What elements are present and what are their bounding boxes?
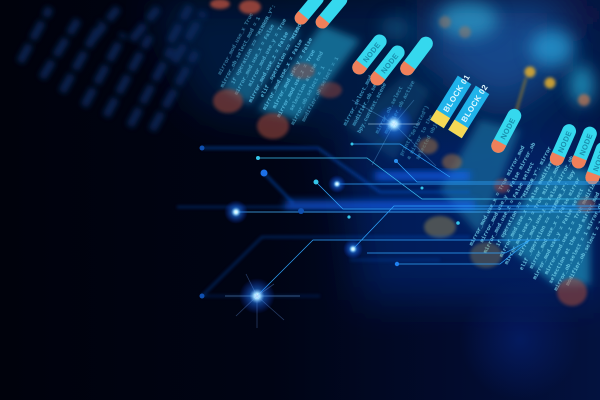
- panel: code text left block: mirror_mod.use_x True: [216, 11, 255, 76]
- node pill 6: [491, 108, 522, 153]
- node pill 7: [550, 124, 576, 166]
- node pill 8: [572, 126, 597, 168]
- node pill 9: [585, 142, 600, 184]
- blurred orange and yellow tips: [439, 16, 590, 112]
- panel: code text middle block: selected object: [414, 114, 444, 161]
- node pill 3: [352, 34, 387, 74]
- panel: code text right block: mirror_mod.use_z = False select: [482, 161, 536, 254]
- node pill 1: [294, 0, 324, 24]
- blurred red node tips: [210, 0, 595, 306]
- panel: code text left block: mirror_mod.use_y = False: [271, 36, 315, 110]
- node pill 8: NODE: [578, 132, 595, 157]
- panel: code text right block: mirror_mod.use_z = False mirror_ob: [517, 154, 576, 257]
- panel: code text right block: mirror_mod.use_y = False select: [531, 187, 585, 281]
- flare: left: [224, 200, 248, 224]
- panel: code text left block: mirror_mod.use_z = True: [275, 48, 317, 119]
- panel: code text left block: modifier_ob.select = 1: [300, 55, 341, 123]
- panel: code text middle block: modifier_ob.select = 1: [351, 59, 391, 127]
- panel: code text left block: [212, 0, 354, 130]
- panel: code text left block: if operation == "MIRROR_Y":: [229, 3, 277, 85]
- node pill 2: [316, 0, 348, 28]
- panel: code text left block: mirror_mod.use_y = True: [246, 17, 289, 88]
- panel: code text left block: elif _operation == "MIRROR_Z":: [259, 8, 311, 99]
- panel: code text middle block: [342, 55, 455, 164]
- panel: teal code bands: [222, 20, 590, 285]
- node pill 4: NODE: [379, 51, 401, 75]
- circuit node dots: [200, 142, 460, 298]
- panel: code text right block: mirror_mod.use_x = True mirror_mod: [468, 145, 526, 247]
- panel: code text right block: selection at the end mirror_mod: [547, 191, 600, 285]
- node and block labels: [292, 0, 600, 186]
- node pill 6: NODE: [499, 116, 517, 141]
- flare: top: [352, 100, 436, 166]
- flare: center: [328, 175, 346, 193]
- lower right glow: [460, 280, 580, 400]
- panel: code text right block: mirror_mod.use_x = False mirror: [528, 176, 582, 270]
- node pill 4: [370, 46, 405, 86]
- panel: code text left block: mirror_mod.use_x = False: [233, 22, 276, 96]
- blurred thick circuit traces: [177, 148, 595, 296]
- panel: code text right block: [468, 132, 600, 296]
- panel: code text left block: mirror_mod.use_x = False: [261, 37, 305, 111]
- panel: code text right block: elif _operation == "MIRROR_Z": bpy: [518, 168, 577, 271]
- panel: code text right block: mirror_mod.use_y = True mirror_mod: [503, 163, 562, 266]
- flare: bottom left: [225, 274, 300, 328]
- panel: code text middle block: bpy.context.scene: [356, 81, 389, 134]
- node pill 7: NODE: [556, 129, 574, 154]
- panel: code text left block: mirror_mod.use_z = False: [247, 30, 291, 104]
- node pill 5: [400, 36, 433, 76]
- block label 1: BLOCK 01: [442, 73, 472, 114]
- panel: blurred background code text: [20, 6, 204, 130]
- panel: code text left block: mirror_ob.select = 1: [289, 64, 327, 126]
- block label 2: [448, 84, 490, 138]
- panel: code text right block: if operation == "MIRROR_Y": mirror: [494, 145, 553, 248]
- light flares: [224, 100, 436, 328]
- panel: code text middle block: modifier_ob.active: [383, 79, 417, 135]
- panel: code text right block: mirror_mod.use_y = False mirror_ob: [478, 141, 538, 244]
- panel: code text middle block: mirror_select_mod: [342, 74, 374, 127]
- panel: code text middle block: print("Selected"): [398, 104, 431, 157]
- node pill 3: NODE: [361, 40, 383, 64]
- block label 2: BLOCK 02: [460, 83, 490, 124]
- flare: lower center: [343, 239, 363, 259]
- panel: code text left block: mirror_ob.select_mod = 1: [219, 15, 262, 89]
- panel: code text left block: selection at the end: [288, 50, 325, 112]
- panel: code text right block: mirror_mod.use_z = True modifier: [543, 179, 599, 276]
- bright glow bands: [285, 172, 475, 209]
- panel: code text middle block: mirror_ob.select: [374, 85, 405, 135]
- panel: code text right block: mirror_mod.use_x = False modifier: [498, 159, 555, 258]
- blurred top blocks: [381, 2, 594, 105]
- block label 1: [430, 75, 472, 128]
- panel: code text middle block: a mirror to the: [405, 113, 435, 161]
- sharp circuit traces: [236, 144, 600, 296]
- ambient glow: [150, 0, 600, 300]
